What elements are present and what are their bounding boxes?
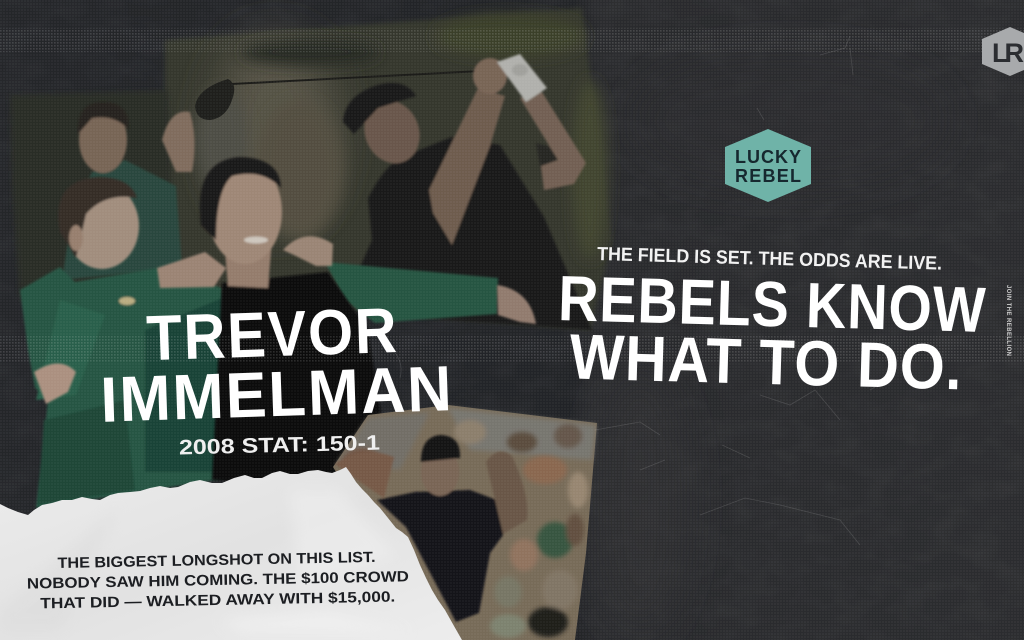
- creases and scratches: [388, 36, 895, 545]
- main headline: WHAT TO DO.: [569, 320, 964, 403]
- man in back: [62, 102, 195, 280]
- paragraph text on paper: NOBODY SAW HIM COMING. THE $100 CROWD: [27, 568, 409, 593]
- paragraph text on paper: THE BIGGEST LONGSHOT ON THIS LIST.: [57, 549, 376, 572]
- photo: golfer swinging: [165, 8, 612, 330]
- LR corner badge: [982, 27, 1024, 76]
- green jacket: [20, 262, 498, 508]
- crowd player: [335, 435, 527, 622]
- odds stat: 2008 STAT: 150-1: [179, 432, 381, 459]
- golf club: [195, 70, 500, 120]
- presenter: [58, 177, 139, 269]
- paragraph text on paper: [26, 548, 410, 613]
- main headline: [556, 262, 987, 404]
- Lucky Rebel logo: [725, 129, 811, 202]
- vertical side note: JOIN THE REBELLION: [1005, 285, 1011, 356]
- photo: crowd celebration: [333, 405, 597, 640]
- torn paper: [0, 467, 462, 640]
- crowd blotches: [342, 420, 588, 638]
- Trevor Immelman: [34, 157, 536, 487]
- tagline: THE FIELD IS SET. THE ODDS ARE LIVE.: [597, 244, 942, 275]
- LR corner badge: LR: [992, 38, 1024, 68]
- player name heading: TREVOR: [145, 294, 400, 374]
- photo: green jacket ceremony: [10, 90, 536, 508]
- paragraph text on paper: THAT DID — WALKED AWAY WITH $15,000.: [40, 589, 395, 612]
- backdrop foliage: [10, 90, 175, 300]
- Lucky Rebel logo: REBEL: [735, 166, 801, 186]
- player name heading: IMMELMAN: [99, 352, 455, 436]
- player name heading: [97, 292, 455, 436]
- golfer body: [343, 54, 592, 330]
- Lucky Rebel logo: LUCKY: [735, 147, 801, 167]
